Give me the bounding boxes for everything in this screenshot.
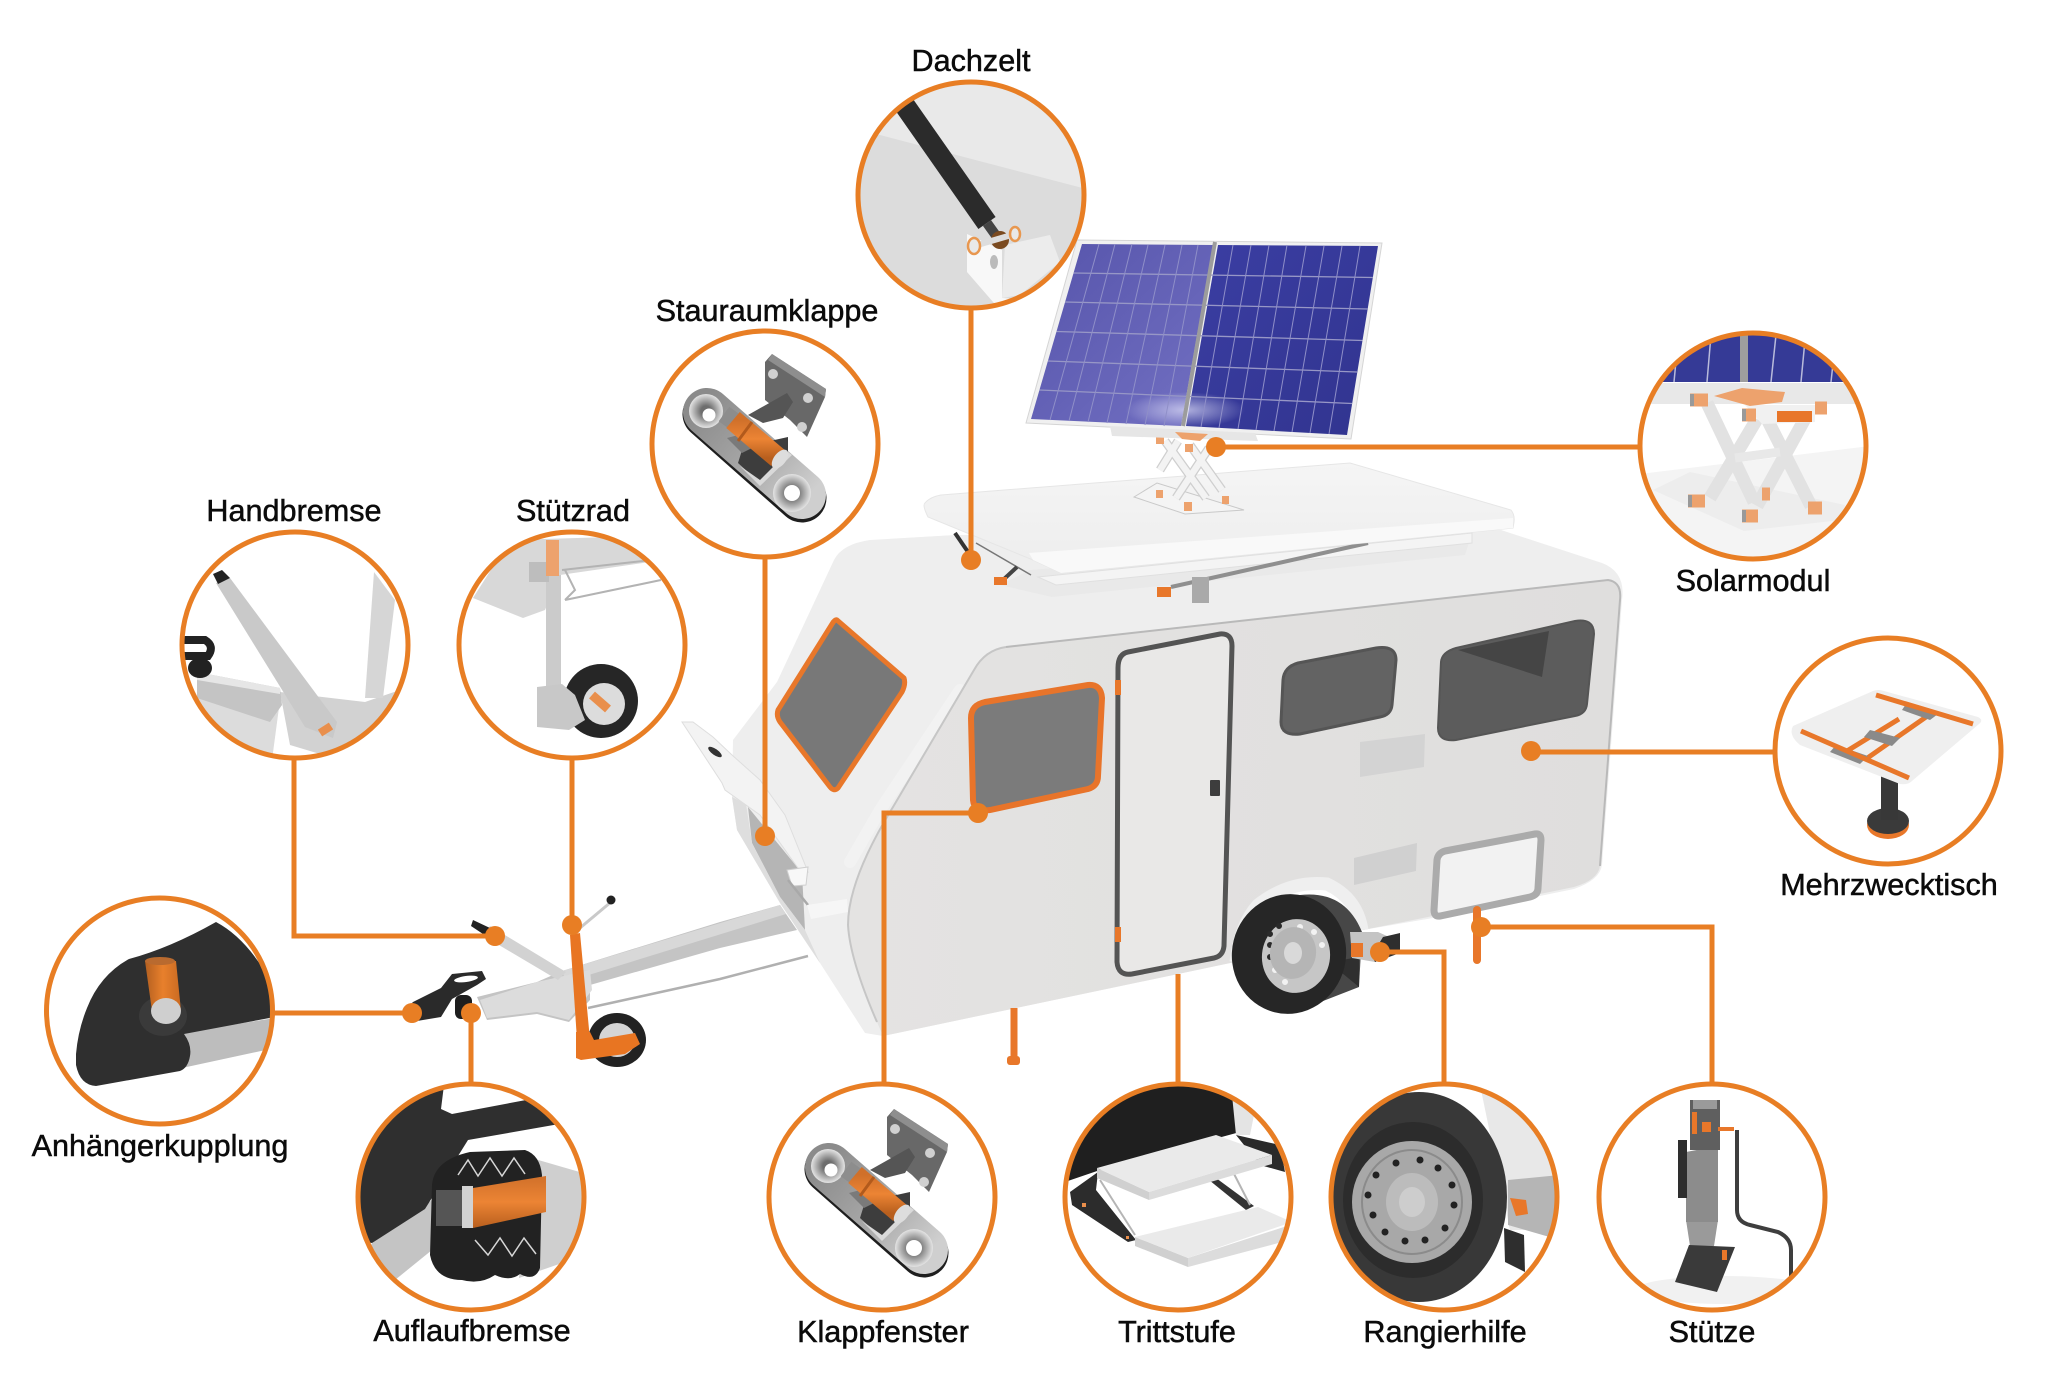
caravan body	[732, 530, 1623, 1036]
connector	[273, 1010, 412, 1016]
sidewall	[1343, 1122, 1483, 1278]
detail: coupling	[76, 922, 275, 1086]
strut neck	[987, 223, 1002, 244]
side panel outline	[1006, 580, 1620, 866]
solar mount orange plate	[1175, 432, 1208, 441]
top housing	[1690, 1100, 1720, 1150]
coupling handle	[404, 971, 486, 1022]
tyre	[1331, 1092, 1507, 1302]
ring	[1775, 638, 2001, 864]
recess side	[732, 797, 820, 963]
orange mechanism	[1692, 1112, 1734, 1134]
wheel well	[1250, 894, 1362, 1010]
dot	[1206, 437, 1226, 457]
solar mount pegs	[1156, 436, 1229, 511]
manoeuvring aid	[1350, 932, 1396, 962]
axle pin	[592, 695, 608, 709]
connector	[294, 757, 495, 936]
fender	[1236, 883, 1362, 962]
solar mount top plate	[1110, 426, 1258, 441]
tyre	[564, 664, 638, 738]
bellows	[430, 1150, 542, 1282]
storage recess	[748, 807, 805, 930]
column	[546, 575, 561, 687]
rim outer	[1352, 1141, 1472, 1263]
pull cord bracket	[1678, 1140, 1687, 1198]
hub	[583, 683, 625, 725]
label: Mehrzwecktisch	[1780, 868, 1998, 902]
mudflap	[1342, 957, 1359, 987]
handbrake lever	[482, 926, 566, 980]
lower hatch	[1354, 843, 1417, 885]
panel frame	[1640, 383, 1856, 404]
lower column	[1686, 1220, 1718, 1246]
ring	[1331, 1084, 1557, 1310]
label: Anhängerkupplung	[32, 1129, 288, 1163]
cross bar	[197, 672, 282, 722]
light stripe	[850, 690, 960, 862]
detail: hinge	[689, 354, 826, 512]
wheel hub	[1284, 942, 1302, 964]
right plate	[1002, 235, 1060, 298]
upright	[365, 572, 395, 698]
orange pin	[145, 961, 181, 1011]
mudflap	[1504, 1228, 1525, 1272]
leg	[1881, 745, 1898, 820]
base top	[1867, 808, 1909, 834]
tent top shell	[924, 463, 1514, 573]
body edge	[1232, 1095, 1255, 1135]
detail: overrun brake	[350, 1085, 590, 1282]
pin socket	[139, 996, 187, 1036]
panel cell lines	[1674, 335, 1835, 382]
step 1 top	[1097, 1135, 1272, 1192]
connector	[968, 307, 974, 560]
top cap	[1693, 1100, 1717, 1109]
callout: Solarmodul	[1206, 330, 1870, 598]
label: Trittstufe	[1118, 1315, 1236, 1349]
latch bar	[788, 880, 808, 905]
label: Handbremse	[206, 494, 382, 528]
handle	[350, 1085, 565, 1243]
plates	[1830, 704, 1938, 764]
solar mount scissor legs shade	[1160, 441, 1222, 498]
cross bar	[1735, 452, 1780, 458]
foot	[537, 684, 585, 730]
detail: support jack	[1635, 1100, 1815, 1304]
dot	[461, 1003, 481, 1023]
solar centre bar	[1183, 242, 1215, 426]
orange roller	[1510, 1198, 1528, 1216]
callout: Anhängerkupplung	[32, 898, 422, 1163]
jockey wheel column	[570, 933, 590, 1040]
tent hinge strut rear	[955, 533, 968, 552]
rim ring	[1362, 1150, 1462, 1254]
solar panel frame	[1026, 240, 1382, 439]
hub centre	[1399, 1187, 1425, 1217]
hub	[1386, 1173, 1438, 1231]
drawbar beam	[477, 905, 797, 1022]
tent edge band	[1029, 518, 1513, 573]
bracket	[967, 234, 1009, 303]
strut rod	[903, 103, 987, 223]
coupling bellows	[188, 658, 212, 678]
callout: Auflaufbremse	[350, 1003, 590, 1348]
steel rod	[436, 1190, 473, 1226]
wheel rim	[1256, 914, 1336, 998]
ring	[769, 1084, 995, 1310]
arm rear	[1209, 1178, 1254, 1210]
label: Dachzelt	[911, 44, 1031, 78]
dot	[968, 803, 988, 823]
tent hinge thin line	[976, 543, 1031, 575]
ring	[1599, 1084, 1825, 1310]
ring	[858, 82, 1084, 308]
roof pole orange bracket	[1157, 587, 1171, 597]
coupling loop	[182, 640, 211, 656]
detail: gas strut	[858, 82, 1090, 310]
solar mount scissor legs	[1160, 441, 1222, 498]
rim holes	[1270, 926, 1279, 957]
collar	[546, 540, 559, 576]
door hinges	[1115, 680, 1121, 942]
side window orange	[971, 685, 1102, 810]
solar mount base	[1134, 483, 1244, 514]
top pad	[1714, 388, 1785, 406]
dot	[402, 1003, 422, 1023]
connector	[468, 1013, 474, 1086]
rim holes light	[1275, 927, 1322, 982]
detail: handbrake	[182, 570, 405, 760]
connector	[762, 557, 768, 836]
latch bracket	[807, 899, 848, 919]
callout: Stützrad	[459, 494, 685, 935]
column	[1686, 1146, 1718, 1222]
centre bar	[1740, 330, 1748, 382]
dot	[485, 926, 505, 946]
orange box	[1777, 411, 1812, 422]
window 3 reflection	[1458, 631, 1549, 677]
wheel centre	[1266, 923, 1320, 983]
callout: Klappfenster	[769, 803, 995, 1349]
lever tip	[213, 570, 230, 584]
label: Klappfenster	[797, 1315, 969, 1349]
detail: solar mount	[1640, 330, 1870, 565]
window 3	[1438, 621, 1594, 740]
latch	[787, 867, 808, 886]
ring	[182, 532, 408, 758]
front window	[777, 620, 905, 790]
bracket	[529, 562, 549, 582]
handbrake tip	[471, 920, 490, 936]
connector	[1481, 927, 1712, 1085]
ring	[652, 331, 878, 557]
base	[1867, 811, 1909, 839]
dot	[961, 550, 981, 570]
tent lower shell	[1038, 533, 1472, 585]
ring	[1640, 333, 1866, 559]
step 1 front	[1149, 1155, 1272, 1200]
drawbar centre plate	[480, 970, 592, 1020]
black underbody	[1060, 1085, 1240, 1182]
fender	[1480, 1085, 1560, 1230]
scissor legs	[1707, 403, 1811, 506]
coupling head	[76, 922, 275, 1086]
front jack foot	[1007, 1056, 1020, 1065]
ring	[358, 1084, 584, 1310]
callout: Dachzelt	[858, 44, 1090, 570]
callout: Mehrzwecktisch	[1521, 638, 2001, 902]
floor	[858, 135, 1090, 310]
right tube	[519, 1157, 590, 1278]
left tube	[360, 1200, 432, 1280]
peg caps	[1688, 400, 1746, 516]
solar panel right	[1186, 245, 1378, 435]
hole	[990, 255, 998, 269]
callout: Stauraumklappe	[652, 294, 878, 846]
dot	[1370, 942, 1390, 962]
label: Stütze	[1669, 1315, 1755, 1349]
crossbars	[1847, 717, 1926, 759]
base plate	[1653, 472, 1845, 531]
front corner line	[848, 647, 1006, 1022]
floor	[1640, 446, 1870, 565]
dot	[755, 826, 775, 846]
dot	[562, 915, 582, 935]
foot orange pin	[1722, 1250, 1727, 1260]
dot	[1471, 917, 1491, 937]
pins	[980, 234, 1009, 247]
label: Stützrad	[516, 494, 630, 528]
tent hinge orange	[994, 577, 1007, 585]
tent hinge strut front	[1003, 567, 1017, 580]
callout: Handbremse	[182, 494, 505, 946]
orange rails	[1801, 695, 1973, 778]
rear jack	[1473, 910, 1481, 960]
wall	[878, 84, 1082, 188]
connector	[884, 813, 978, 1085]
pin end left	[968, 238, 980, 254]
roof tier	[1000, 533, 1472, 597]
bellows	[455, 995, 472, 1019]
detail: folding step	[1060, 1085, 1292, 1267]
solar panel left	[1031, 244, 1213, 426]
floor shadow	[1635, 1276, 1815, 1304]
storage hatch	[1434, 834, 1541, 916]
detail: table	[1792, 690, 1981, 839]
bar top	[197, 674, 280, 694]
rim holes	[1368, 1160, 1454, 1241]
rods	[1100, 1170, 1250, 1235]
vent	[1360, 734, 1425, 777]
cable	[1737, 1130, 1791, 1280]
callout: Rangierhilfe	[1331, 942, 1560, 1349]
jockey wheel crank	[574, 902, 611, 933]
step 2 front	[1188, 1225, 1290, 1267]
blue panel	[1640, 330, 1870, 382]
window 2	[1281, 648, 1396, 734]
callout: Stütze	[1471, 917, 1825, 1349]
door	[1117, 634, 1232, 974]
step 1 edge	[1097, 1168, 1149, 1200]
ring	[1065, 1084, 1291, 1310]
wires	[562, 559, 661, 600]
crank knob	[606, 896, 616, 904]
solar grid lines	[1040, 273, 1373, 404]
lever	[216, 578, 337, 738]
foot	[1675, 1245, 1735, 1292]
connector	[1216, 444, 1640, 450]
ring	[459, 532, 685, 758]
arm left	[1070, 1172, 1136, 1242]
illustration: caravan with drawbar	[404, 240, 1623, 1067]
manoeuvring aid orange	[1351, 943, 1363, 957]
connector	[1531, 750, 1775, 754]
ring	[46, 898, 272, 1124]
base right	[280, 692, 395, 753]
pegs	[1688, 400, 1827, 516]
detail: jockey wheel	[473, 538, 662, 738]
label: Auflaufbremse	[373, 1314, 571, 1348]
label: Solarmodul	[1676, 564, 1830, 598]
pivots	[1082, 1172, 1129, 1239]
step 2 edge	[1135, 1237, 1188, 1267]
flap hole	[707, 745, 723, 759]
front jack	[1010, 1008, 1018, 1058]
label: Rangierhilfe	[1363, 1315, 1527, 1349]
solar cell lines	[1050, 244, 1360, 434]
joint	[991, 231, 1009, 249]
lower floor plate	[198, 698, 279, 754]
spring top	[458, 1158, 525, 1176]
spring bottom	[475, 1238, 536, 1256]
front flap	[682, 722, 808, 872]
callout: Trittstufe	[1060, 974, 1292, 1349]
coupling loop hole	[454, 974, 478, 984]
tent strut	[1171, 543, 1368, 587]
solar glare	[1125, 392, 1245, 428]
tyre behind	[1236, 1135, 1285, 1172]
orange pin	[320, 726, 331, 733]
table top	[1792, 690, 1981, 784]
pin cap	[151, 998, 181, 1024]
pin top	[145, 957, 175, 965]
label: Stauraumklappe	[656, 294, 878, 328]
detail: hinge	[811, 1109, 948, 1267]
door handle	[1210, 780, 1220, 796]
wheel tyre	[1219, 882, 1359, 1026]
orange cylinder	[473, 1176, 546, 1228]
side panel	[848, 580, 1620, 1036]
detail: wheel and mover	[1331, 1085, 1560, 1302]
manoeuvring aid motor	[1372, 933, 1400, 962]
roof pole	[1192, 577, 1209, 603]
bracket	[1508, 1175, 1560, 1240]
tube	[184, 1018, 270, 1068]
drawbar highlight	[562, 905, 786, 982]
step 2 top	[1135, 1207, 1292, 1258]
steel ring	[462, 1186, 473, 1228]
connector	[1380, 952, 1444, 1085]
pin end right	[1010, 227, 1020, 241]
jockey wheel foot	[576, 1032, 640, 1060]
connector	[1176, 974, 1180, 1085]
jockey wheel tyre	[588, 1013, 646, 1067]
jockey wheel hub	[599, 1023, 635, 1057]
dot	[1521, 741, 1541, 761]
plate under panel	[1745, 405, 1815, 424]
frame	[473, 538, 646, 618]
connector	[570, 757, 574, 925]
drawbar wire	[588, 956, 808, 1008]
